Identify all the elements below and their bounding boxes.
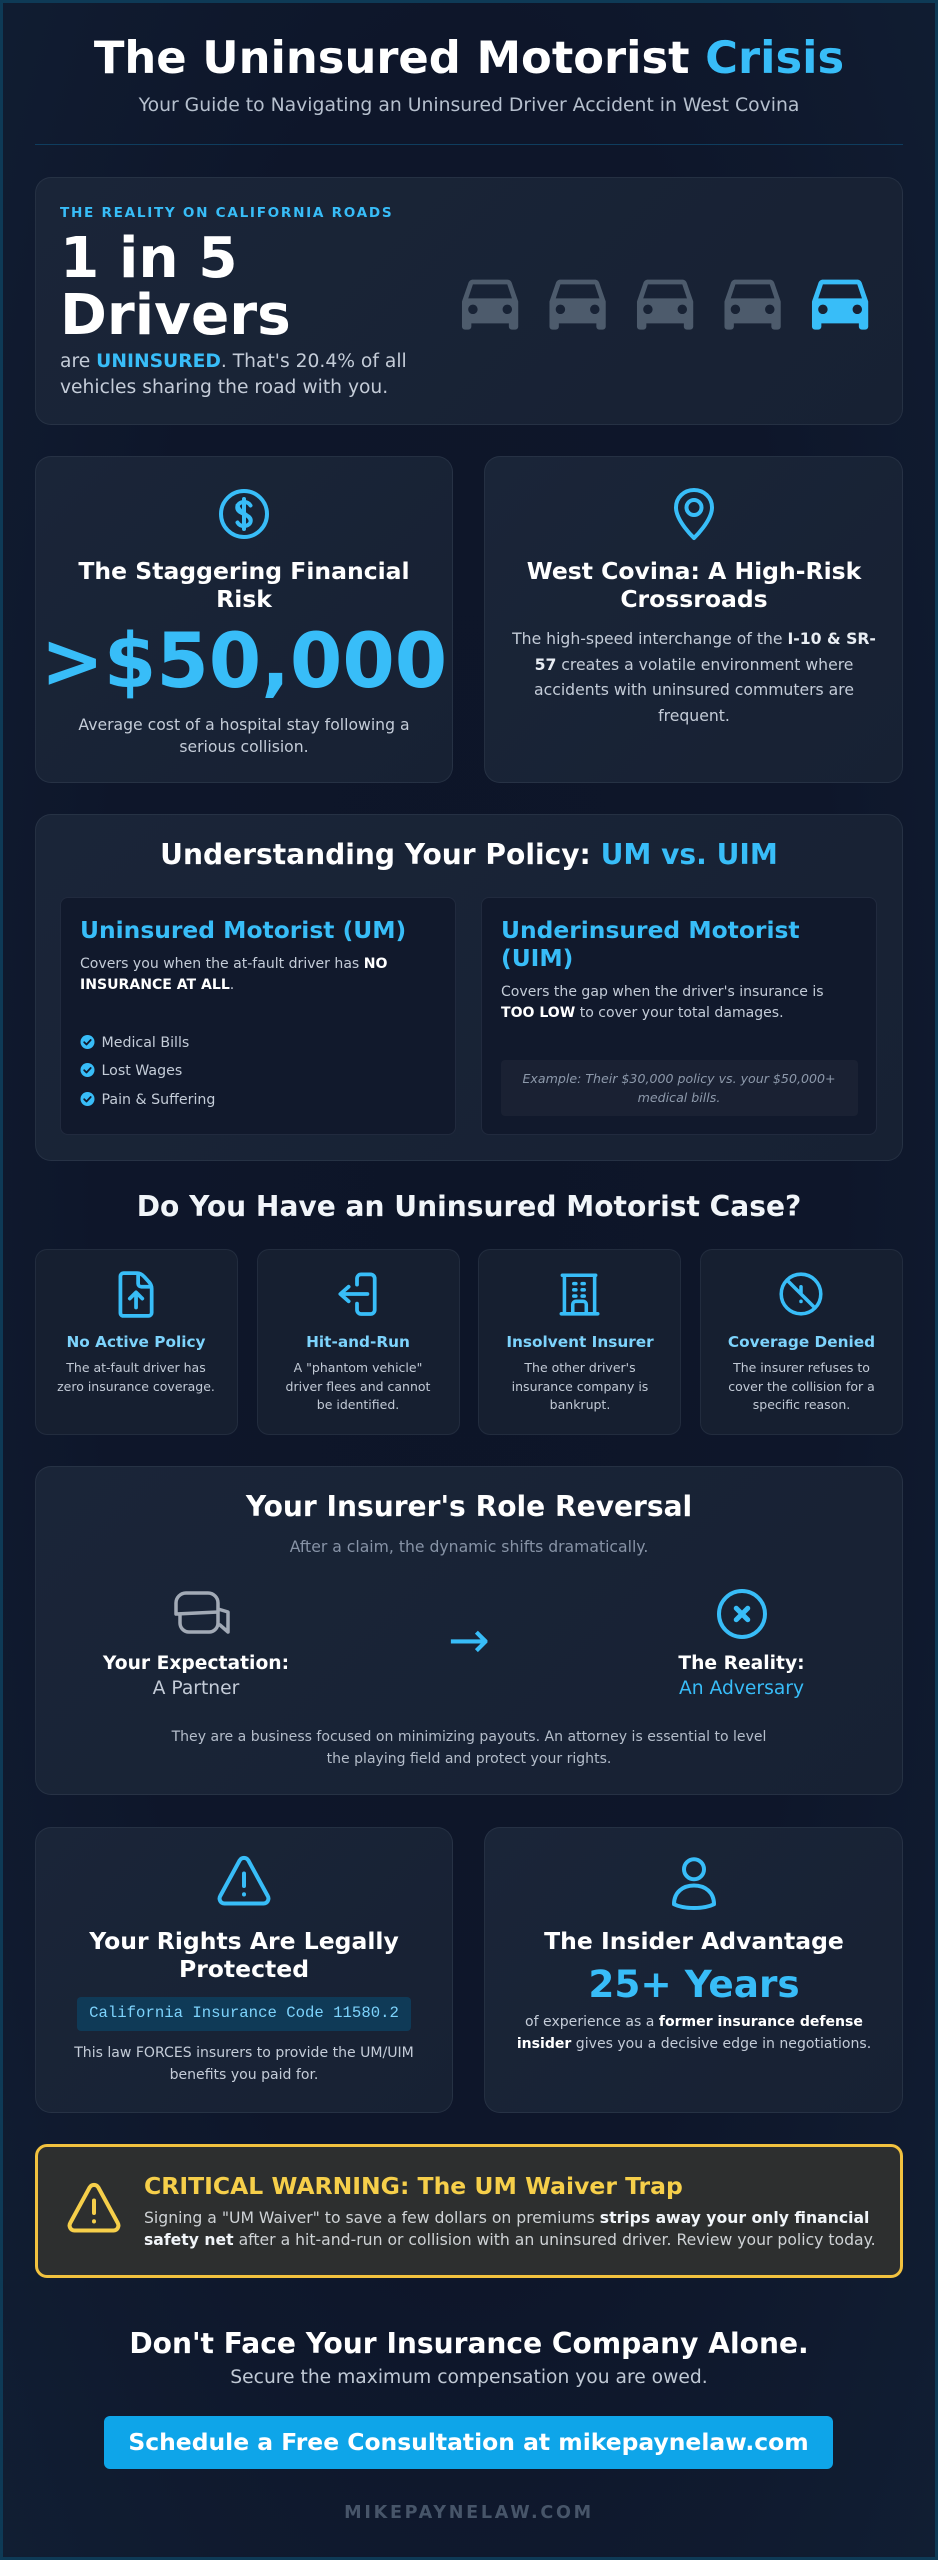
icon: building [560, 1274, 600, 1316]
panel: no active policy [35, 1249, 238, 1435]
text: no active policy: The at-fault driver has [66, 1360, 206, 1375]
text: role reversal: They are a business focused on minimizing payouts. An attorney is essential to level [172, 1729, 766, 1745]
footer: site name: MIKEPAYNELAW.COM [344, 2503, 594, 2523]
icon: check [80, 1063, 94, 1077]
text: insolvent insurer: insurance company is [512, 1379, 648, 1394]
text: hit and run [286, 1360, 430, 1412]
label: reality: The Reality: [678, 1653, 805, 1674]
heading: insider advantage: The Insider Advantage [544, 1927, 844, 1955]
statistic: 25+ years: 25+ Years [588, 1962, 800, 2006]
button: schedule consultation [104, 2416, 833, 2469]
title: The Uninsured Motorist Crisis [94, 31, 844, 84]
heading: legal rights: Protected [179, 1955, 309, 1983]
text: legal rights [74, 2045, 414, 2083]
heading: insolvent insurer: Insolvent Insurer [506, 1333, 654, 1351]
text: UIM: TOO LOW to cover your total damages. [501, 1005, 784, 1021]
statistic description [60, 351, 407, 398]
label: expectation: A Partner [153, 1678, 239, 1699]
panel: insider advantage [484, 1827, 903, 2113]
heading: legal rights [89, 1927, 399, 1983]
text: hit and run: driver flees and cannot [286, 1379, 430, 1394]
text: warning: Signing a "UM Waiver" to save a few dollars on premiums strips away your only financial [144, 2208, 869, 2227]
text: role reversal: the playing field and protect your rights. [327, 1751, 611, 1767]
icon: exit arrow [338, 1272, 377, 1316]
caption: hospital cost [78, 715, 410, 756]
heading: warning: CRITICAL WARNING: The UM Waiver Trap [144, 2172, 683, 2200]
heading: hit and run: Hit-and-Run [306, 1333, 410, 1351]
icon: document upload [118, 1271, 154, 1318]
big statistic: 1 in 5 [60, 226, 238, 291]
heading: west covina: Crossroads [620, 585, 768, 613]
text: legal rights: benefits you paid for. [170, 2067, 318, 2083]
example callout [501, 1060, 858, 1116]
heading: policy: Understanding Your Policy: UM vs. UIM [160, 838, 778, 871]
text: UIM: Covers the gap when the driver's insurance is [501, 984, 824, 1000]
panel: coverage denied [700, 1249, 903, 1435]
text: west covina: The high-speed interchange of the I-10 & SR- [512, 629, 876, 648]
panel: legal rights [35, 1827, 453, 2113]
statistic description: are UNINSURED. That's 20.4% of all [60, 351, 407, 372]
heading: financial risk [78, 557, 410, 613]
big statistic [60, 226, 291, 348]
heading: west covina: West Covina: A High-Risk [527, 557, 861, 585]
heading: role reversal: Your Insurer's Role Reversal [246, 1490, 692, 1523]
panel: underinsured motorist [481, 897, 877, 1135]
example text: medical bills. [638, 1090, 720, 1105]
code text: California Insurance Code 11580.2 [89, 2004, 399, 2022]
heading: UIM: (UIM) [501, 944, 573, 972]
icon: warning triangle [218, 1856, 270, 1906]
code badge [76, 1997, 411, 2031]
text: west covina: frequent. [658, 706, 730, 724]
icon row: five cars [462, 280, 868, 330]
caption: hospital cost: Average cost of a hospital stay following a [78, 715, 410, 734]
statistic: $50,000: >$50,000 [41, 617, 447, 705]
text: coverage denied: specific reason. [753, 1397, 850, 1412]
heading: legal rights: Your Rights Are Legally [89, 1927, 399, 1955]
text: west covina [512, 629, 876, 724]
text: insolvent insurer [512, 1360, 648, 1412]
button: schedule consultation: Schedule a Free Consultation at mikepaynelaw.com [128, 2428, 809, 2456]
text: insider advantage: of experience as a former insurance defense [525, 2014, 863, 2030]
icon: warning triangle [68, 2182, 120, 2232]
icon: chat partner [174, 1591, 230, 1634]
big statistic: Drivers [60, 283, 291, 348]
panel: role reversal [35, 1466, 903, 1795]
text: UM: INSURANCE AT ALL. [80, 977, 234, 993]
text: UM: Covers you when the at-fault driver has NO [80, 956, 387, 972]
text: warning [144, 2208, 876, 2249]
text: no active policy [57, 1360, 215, 1394]
text: role reversal [172, 1729, 766, 1767]
text: hit and run: be identified. [317, 1397, 399, 1412]
heading: financial risk: Risk [216, 585, 272, 613]
label: reality: An Adversary [679, 1678, 804, 1699]
label: expectation [102, 1653, 289, 1699]
heading: coverage denied: Coverage Denied [728, 1333, 875, 1351]
icon: prohibited [779, 1272, 823, 1316]
text: west covina: accidents with uninsured commuters are [534, 680, 854, 699]
eyebrow label: THE REALITY ON CALIFORNIA ROADS [60, 205, 393, 221]
icon: dollar [219, 489, 269, 539]
heading: UIM: Underinsured Motorist [501, 916, 800, 944]
checklist [80, 1034, 215, 1108]
checklist: Lost Wages [102, 1062, 182, 1078]
text: no active policy: zero insurance coverage. [57, 1379, 215, 1394]
text: UM [80, 956, 387, 993]
checklist: Medical Bills [102, 1034, 189, 1050]
arrow: → [448, 1611, 490, 1669]
text: coverage denied [728, 1360, 875, 1412]
heading: financial risk: The Staggering Financial [78, 557, 410, 585]
checklist: Pain & Suffering [102, 1092, 215, 1108]
icon: map pin [674, 488, 714, 540]
panel: uninsured motorist [60, 897, 456, 1135]
heading: west covina [527, 557, 862, 613]
text: coverage denied: The insurer refuses to [733, 1360, 870, 1375]
icon: person [672, 1857, 716, 1910]
panel: financial risk [35, 456, 453, 783]
icon: check [80, 1035, 94, 1049]
text: insolvent insurer: The other driver's [524, 1360, 636, 1375]
label: reality [678, 1653, 805, 1699]
heading: UM: Uninsured Motorist (UM) [80, 916, 406, 944]
text: west covina: 57 creates a volatile environment where [535, 654, 853, 674]
text: coverage denied: cover the collision for a [728, 1379, 875, 1394]
text: hit and run: A "phantom vehicle" [294, 1360, 422, 1375]
text: legal rights: This law FORCES insurers to provide the UM/UIM [74, 2045, 414, 2061]
statistic description: vehicles sharing the road with you. [60, 376, 388, 398]
heading: call to action: Don't Face Your Insurance Company Alone. [129, 2327, 809, 2360]
panel: hit and run [257, 1249, 460, 1435]
callout: critical warning [35, 2144, 903, 2278]
text: insolvent insurer: bankrupt. [550, 1397, 610, 1412]
example text: Example: Their $30,000 policy vs. your $50,000+ [522, 1071, 836, 1086]
heading: no active policy: No Active Policy [66, 1333, 206, 1351]
text: UIM [501, 984, 824, 1021]
subheading: role reversal: After a claim, the dynamic shifts dramatically. [290, 1537, 648, 1556]
panel: insolvent insurer [478, 1249, 681, 1435]
heading: UIM [501, 916, 800, 972]
caption: hospital cost: serious collision. [179, 737, 309, 756]
example text [522, 1071, 836, 1105]
subheading: call to action: Secure the maximum compensation you are owed. [230, 2367, 708, 2388]
panel: UM vs UIM [35, 814, 903, 1161]
text: warning: safety net after a hit-and-run or collision with an uninsured driver. Review your policy today. [144, 2230, 876, 2249]
heading: do you have a case: Do You Have an Uninsured Motorist Case? [137, 1190, 801, 1223]
panel: west covina [484, 456, 903, 783]
subtitle: Your Guide to Navigating an Uninsured Driver Accident in West Covina [139, 95, 799, 116]
label: expectation: Your Expectation: [103, 1653, 289, 1674]
panel: 1 in 5 drivers [35, 177, 903, 425]
icon: x circle [717, 1589, 767, 1639]
text: insider advantage [517, 2014, 871, 2052]
text: insider advantage: insider gives you a decisive edge in negotiations. [517, 2036, 871, 2052]
icon: check [80, 1092, 94, 1106]
